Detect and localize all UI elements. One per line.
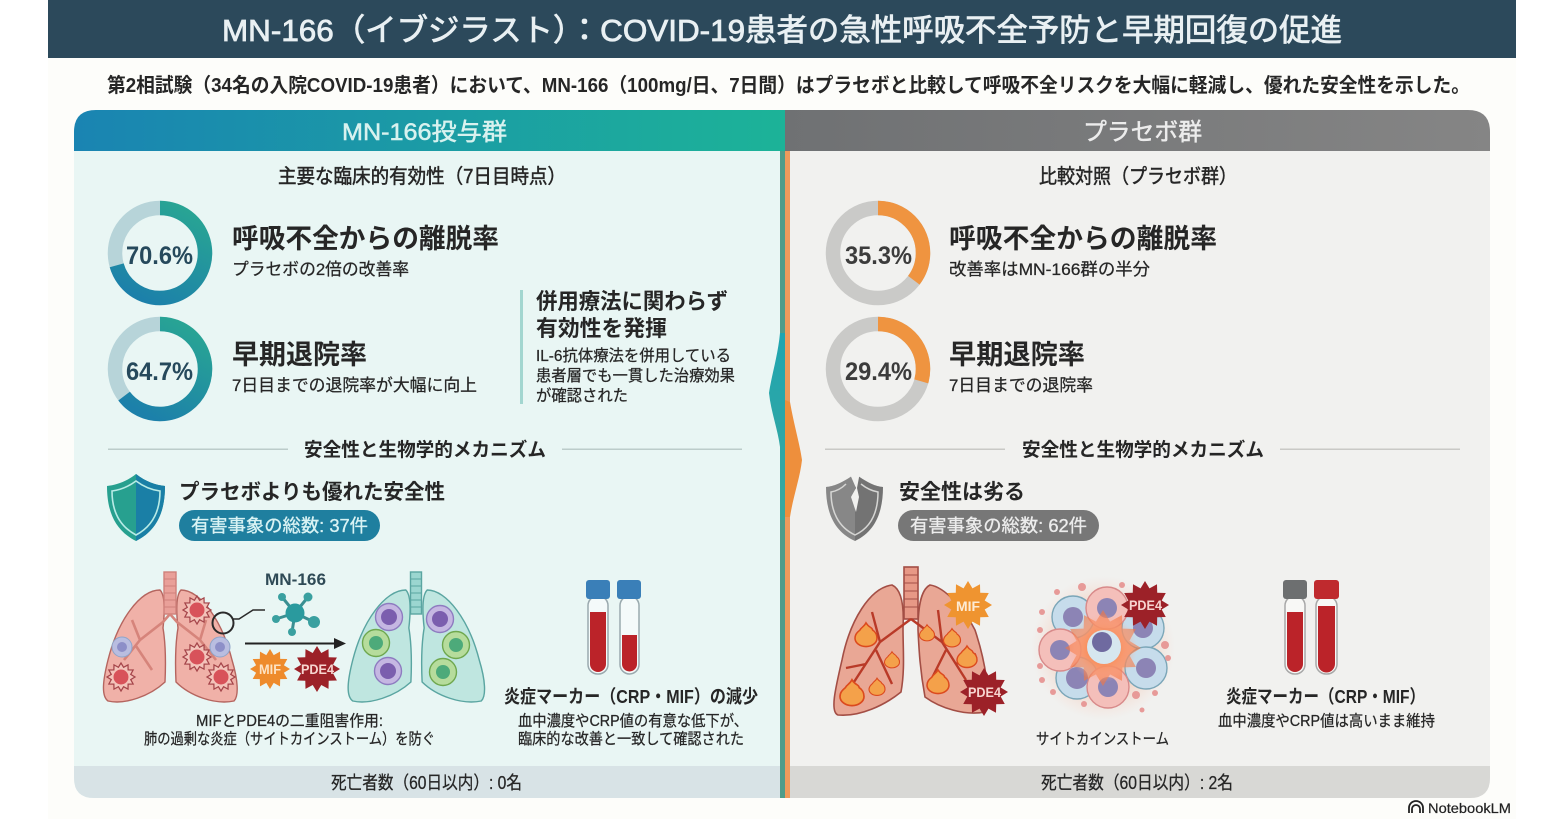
illustration: cytokine storm (1031, 576, 1175, 720)
stat: respiratory failure recovery placebo: 呼吸不全からの離脱率 (949, 224, 1217, 254)
donut: 29.4%: 29.4% (845, 358, 912, 386)
badge: PDE4 lung (960, 668, 1008, 716)
title banner (48, 0, 1516, 58)
donut: 70.6%: 70.6% (126, 242, 193, 270)
panel body: MN-166 (74, 151, 781, 798)
badge: MIF: MIF (259, 661, 281, 677)
section heading: safety and mechanism placebo: 安全性と生物学的メカニズム (1022, 438, 1264, 461)
donut: 35.3%: 35.3% (845, 242, 912, 270)
stat: early discharge placebo: 早期退院率 (949, 340, 1085, 370)
logo: NotebookLM: NotebookLM (1428, 800, 1511, 816)
footer: deaths 2: 死亡者数（60日以内）: 2名 (1041, 773, 1233, 793)
caption: dual inhibition (144, 712, 435, 748)
footer: deaths 2 (789, 766, 1490, 798)
badge: PDE4 cells (1121, 581, 1169, 629)
caption: inflammation markers high (1218, 686, 1435, 730)
footer: deaths 0: 死亡者数（60日以内）: 0名 (331, 773, 522, 793)
section heading: efficacy: 主要な臨床的有効性（7日目時点） (278, 165, 566, 188)
caption: dual inhibition: 肺の過剰な炎症（サイトカインストーム）を防ぐ (144, 730, 435, 748)
callout: combination therapy: 患者層でも一貫した治療効果 (536, 367, 735, 385)
stat: respiratory failure recovery (232, 224, 499, 279)
caption: inflammation markers reduced: 血中濃度やCRP値の有意な低下が、 (518, 712, 748, 730)
panel header: placebo (785, 110, 1490, 151)
stat: respiratory failure recovery placebo: 改善率はMN-166群の半分 (949, 260, 1150, 279)
caption: inflammation markers reduced: 炎症マーカー（CRP・MIF）の減少 (504, 686, 758, 707)
stat: respiratory failure recovery: 呼吸不全からの離脱率 (232, 224, 499, 254)
label: MN-166: MN-166 (265, 570, 326, 589)
donut: 35.3% (833, 208, 923, 298)
stat: early discharge: 早期退院率 (232, 340, 367, 370)
panel body: placebo (789, 151, 1490, 798)
badge: MIF (250, 649, 290, 689)
donut: 70.6% (115, 208, 205, 298)
donut: 29.4% (833, 324, 923, 414)
caption: cytokine storm: サイトカインストーム (1036, 731, 1169, 748)
badge: adverse events 62 (898, 510, 1099, 541)
icon: broken shield (826, 472, 883, 541)
callout: combination therapy: IL-6抗体療法を併用している (536, 347, 731, 365)
subtitle: 第2相試験（34名の入院COVID-19患者）において、MN-166（100mg/日、7日間）はプラセボと比較して呼吸不全リスクを大幅に軽減し、優れた安全性を示した。 (107, 73, 1470, 97)
panel header: placebo: プラセボ群 (1083, 119, 1202, 146)
illustration: healthy lungs (348, 572, 485, 702)
panel: MN-166 group (74, 110, 786, 798)
badge: adverse events 62: 有害事象の総数: 62件 (910, 516, 1087, 536)
icon: molecule (272, 592, 320, 636)
badge: PDE4: PDE4 (301, 661, 334, 677)
title banner: MN-166（イブジラスト）：COVID-19患者の急性呼吸不全予防と早期回復の促進 (222, 13, 1342, 48)
badge: PDE4 (294, 646, 340, 692)
donut: 64.7%: 64.7% (126, 358, 193, 386)
icon: blood tubes (586, 580, 641, 674)
badge: MIF placebo: MIF (956, 598, 980, 614)
section heading: safety and mechanism: 安全性と生物学的メカニズム (304, 438, 546, 461)
caption: inflammation markers high: 炎症マーカー（CRP・MIF） (1226, 686, 1425, 707)
section heading: comparison: 比較対照（プラセボ群） (1039, 165, 1237, 188)
caption: inflammation markers reduced (504, 686, 758, 748)
badge: PDE4 cells: PDE4 (1129, 597, 1162, 613)
panel: placebo group (785, 110, 1490, 798)
panel header: MN-166: MN-166投与群 (342, 119, 507, 146)
stat: early discharge placebo (949, 340, 1093, 395)
footer: deaths 0 (74, 766, 781, 798)
icon: blood tubes placebo (1283, 580, 1339, 674)
stat: early discharge: 7日目までの退院率が大幅に向上 (232, 376, 477, 395)
caption: dual inhibition: MIFとPDE4の二重阻害作用: (196, 712, 383, 730)
center divider (769, 151, 802, 798)
badge: adverse events 37: 有害事象の総数: 37件 (191, 516, 368, 536)
callout: combination therapy: 併用療法に関わらず (536, 289, 728, 314)
callout: combination therapy: が確認された (536, 387, 628, 405)
stat: early discharge placebo: 7日目までの退院率 (949, 376, 1093, 395)
safety heading placebo: 安全性は劣る (899, 481, 1025, 504)
safety heading: プラセボよりも優れた安全性 (179, 481, 445, 504)
callout: combination therapy (520, 289, 735, 405)
stat: respiratory failure recovery placebo (949, 224, 1217, 279)
badge: PDE4 lung: PDE4 (968, 684, 1001, 700)
badge: MIF placebo (944, 581, 992, 629)
callout: combination therapy: 有効性を発揮 (536, 316, 667, 341)
badge: adverse events 37 (179, 510, 380, 541)
stat: early discharge (232, 340, 477, 395)
donut: 64.7% (115, 324, 205, 414)
stat: respiratory failure recovery: プラセボの2倍の改善率 (232, 260, 409, 279)
panel header: MN-166 (74, 110, 786, 151)
caption: inflammation markers high: 血中濃度やCRP値は高いまま維持 (1218, 712, 1435, 730)
arrow: treatment effect (245, 638, 346, 649)
illustration: inflamed lungs (103, 572, 265, 702)
icon: shield (107, 474, 165, 541)
illustration: burning lungs (834, 567, 988, 715)
caption: inflammation markers reduced: 臨床的な改善と一致して確認された (518, 730, 744, 748)
